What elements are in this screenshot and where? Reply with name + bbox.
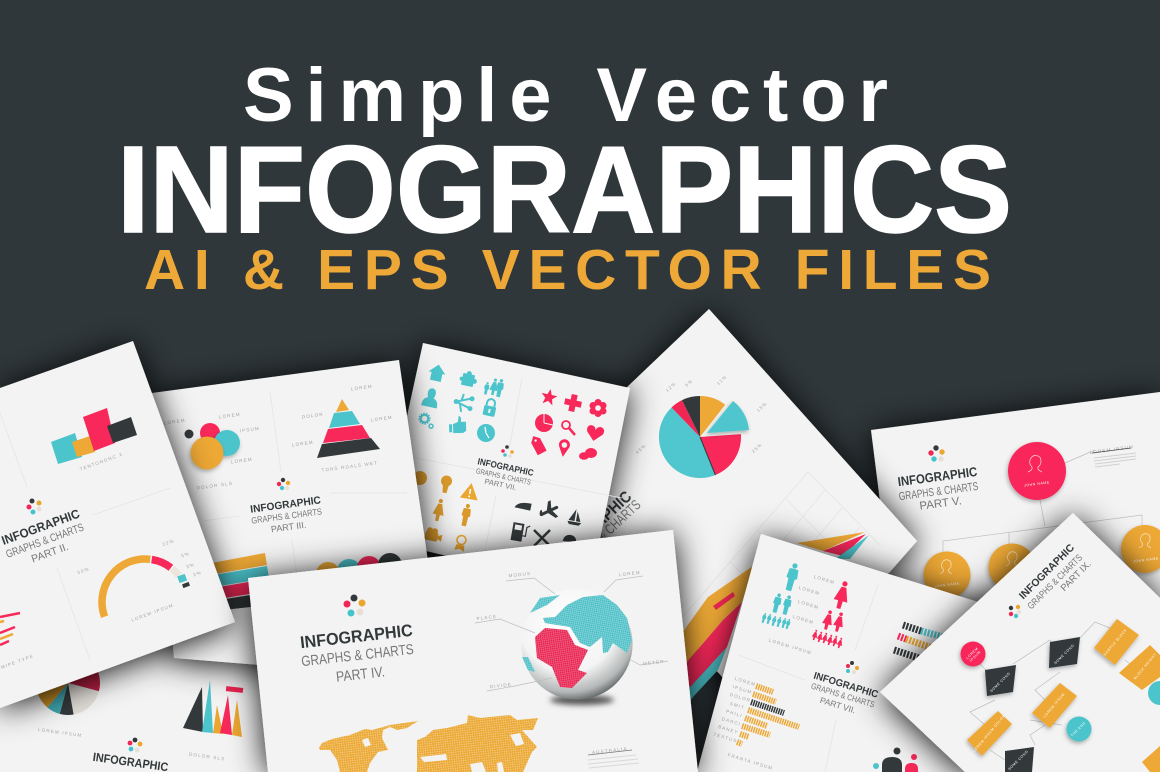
grid lines (680, 472, 880, 665)
pie labels: 11% (716, 374, 728, 386)
pyramid labels (292, 384, 393, 473)
subheading: GRAPHS & CHARTS (475, 466, 532, 487)
red start circle: LOREM (965, 646, 979, 660)
icon: chat bubbles (579, 448, 597, 460)
subtitle: AI & EPS vector files: AI & EPS VECTOR FILES (144, 238, 991, 302)
globe labels: METER (643, 659, 665, 666)
icon rows (894, 625, 943, 659)
pie labels: 45% (635, 443, 647, 455)
icon: map pin (557, 439, 571, 458)
bottom people (873, 748, 918, 772)
icon: heart (585, 424, 605, 443)
cluster labels: LOREM (231, 457, 253, 464)
people labels (768, 574, 836, 655)
gauge labels: 22% (162, 538, 175, 547)
panel: part VII icons (380, 343, 630, 590)
people bar labels: SMIT (729, 701, 746, 710)
dark icons (511, 499, 583, 546)
overlapping circles (316, 553, 402, 586)
pie chart (37, 658, 100, 715)
icon: thumbs up (449, 416, 466, 433)
cluster labels: LOREM (164, 418, 186, 425)
part label: PART IX. (1059, 559, 1094, 594)
people bar labels: IPSUM (732, 684, 753, 695)
process text (972, 628, 1158, 753)
icon: puzzle (458, 369, 479, 388)
teal pyramid of men (761, 562, 801, 629)
part label: PART VII. (484, 477, 517, 492)
people bar labels: PHILI (725, 709, 743, 718)
part label: PART VII. (819, 695, 857, 715)
subheading: GRAPHS & CHARTS (898, 481, 979, 503)
pyramid labels: LOREM (351, 384, 373, 391)
pyramid labels: TONS ROALS WET (321, 460, 378, 473)
end text: THE END (1070, 721, 1087, 738)
globe labels: MODUS (508, 571, 531, 578)
heading: INFOGRAPHIC (250, 494, 322, 516)
semicircle gauge (102, 559, 190, 617)
block chart caption: TENTONONC X (79, 451, 124, 472)
subheading: GRAPHS & CHARTS (301, 642, 415, 670)
orange profile circle left: JOHN NAME (934, 581, 960, 589)
icon: camera (424, 527, 443, 543)
icon: woman (431, 498, 447, 522)
panel: pie chart sheet (540, 309, 917, 720)
part label: PART II. (30, 541, 70, 565)
icon: flower (590, 399, 606, 417)
red icons (529, 388, 606, 460)
icon: sailboat (567, 508, 583, 526)
icon: medal (454, 535, 467, 552)
area chart (670, 532, 869, 715)
teal icons (418, 363, 505, 442)
icon: car (563, 534, 578, 543)
globe labels: PLACE (476, 614, 497, 621)
cluster labels (164, 412, 260, 490)
people bar labels: DOLOR (729, 692, 752, 703)
decision text (989, 643, 1075, 771)
red profile circle (1008, 442, 1066, 500)
icon: plane (536, 499, 562, 523)
icon: train (515, 500, 532, 511)
globe labels (475, 570, 668, 691)
circle cluster (184, 423, 240, 470)
panel: part III sheet (152, 360, 445, 680)
label: Australia: AUSTRALIA (592, 746, 628, 755)
icon: bulb (439, 475, 453, 494)
icon: pie (535, 414, 553, 432)
pie labels (635, 374, 768, 455)
red start circle (960, 642, 986, 666)
orange profile circle right (1121, 525, 1160, 573)
pie caption: LOREM IPSUM (38, 727, 83, 738)
cluster labels: IPSUM (239, 426, 260, 433)
red pyramid of women (811, 580, 852, 649)
people bar labels: DARCI (721, 716, 742, 727)
pie labels: 5% (684, 378, 694, 388)
part label: PART IV. (335, 664, 386, 686)
connector lines (970, 622, 1135, 760)
gauge labels: 3% (185, 562, 196, 569)
title: INFOGRAPHICS: INFOGRAPHICS (117, 122, 1012, 259)
title: Simple Vector: Simple Vector (243, 53, 888, 138)
gauge caption: LOREM IPSUM (131, 603, 174, 623)
gauge labels (77, 538, 203, 577)
subheading: GRAPHS & CHARTS (560, 496, 644, 576)
heading: INFOGRAPHIC (551, 488, 636, 569)
globe labels: LOREM (619, 570, 641, 577)
logo (26, 498, 42, 514)
icon: family (483, 376, 505, 398)
orange profile circle right: JOHN NAME (1133, 556, 1159, 564)
ribbon bars (190, 553, 277, 612)
icon: warning (460, 482, 480, 500)
process text: LOREM IPSUM DOLOR (972, 714, 1006, 753)
icon: user (421, 387, 441, 408)
part label: PART V. (919, 495, 962, 513)
red profile circle: JOHN NAME (1024, 480, 1050, 488)
icon: speech bubble (413, 471, 427, 485)
orange process boxes (967, 619, 1160, 772)
decision text: SOME COND (1007, 749, 1029, 771)
heading: INFOGRAPHIC (477, 456, 535, 478)
heading: INFOGRAPHIC (897, 464, 979, 489)
mountain chart (183, 680, 243, 737)
part label: PART III. (270, 520, 307, 534)
orange icons (413, 471, 480, 552)
cluster labels: LOREM (219, 412, 241, 419)
pie labels: 15% (756, 401, 768, 413)
bar chart caption: MIPE TYPE (0, 653, 35, 670)
orange profile circle left (924, 552, 970, 598)
logo (128, 738, 142, 752)
process text: BLOCK HEIGHT (1133, 652, 1158, 680)
label: Australia (588, 746, 639, 768)
bar chart (0, 613, 20, 645)
caption: FRANTA IPSUM (727, 752, 774, 771)
process text: SAMPLE BLOCK (1103, 628, 1128, 657)
people labels: LOREM IPSUM (768, 638, 813, 655)
heading: INFOGRAPHIC (299, 621, 414, 652)
icon: tag (529, 434, 547, 455)
pyramid labels: LOREM (371, 415, 393, 422)
orange profile circle middle (988, 544, 1036, 590)
icon: fuel pump (511, 522, 530, 543)
gauge labels: 5% (180, 551, 191, 558)
connector lines (943, 450, 1142, 558)
people bar chart (737, 686, 799, 744)
logo (1009, 605, 1021, 618)
people labels: LOREM (792, 614, 815, 625)
decision text: SOME COND (989, 671, 1011, 693)
panel: part II sheet (0, 341, 235, 708)
icon: star (540, 388, 558, 406)
icon: padlock (482, 398, 498, 417)
pie labels: 12% (665, 381, 677, 393)
pie labels: 25% (751, 442, 763, 454)
panel: part VII people (697, 534, 1010, 772)
world map (319, 715, 538, 772)
people labels: LOREM (813, 574, 836, 585)
heading: INFOGRAPHIC (0, 507, 82, 548)
pyramid labels: LOREM (292, 440, 314, 447)
people bar labels: TEXTUS (713, 732, 738, 744)
red start circle: IPSUM (969, 650, 982, 663)
panel: part IV main sheet (248, 530, 698, 772)
icon: share (453, 392, 474, 414)
pyramid (317, 399, 380, 458)
logo (344, 594, 366, 616)
people bar labels (713, 676, 757, 744)
chart caption: DOLOR SLS (189, 751, 226, 762)
logo (846, 661, 859, 674)
gauge labels: 2% (192, 570, 203, 577)
block chart (51, 408, 137, 464)
pyramid labels: DOLOR (302, 412, 324, 419)
subheading: GRAPHS & CHARTS (1026, 553, 1085, 612)
dark decision diamonds (985, 637, 1080, 772)
people labels: LOREM (798, 585, 821, 596)
icon: house (427, 363, 447, 383)
heading: INFOGRAPHIC (1017, 542, 1077, 602)
people labels: LOREM (797, 599, 820, 610)
teal end circles (1066, 681, 1160, 742)
people bar labels: LOREM (734, 676, 757, 687)
panel: part IX flowchart (880, 513, 1160, 772)
label lorem ipsum (1089, 444, 1136, 467)
globe labels: DIVIDE (490, 682, 512, 689)
gauge labels: 50% (77, 566, 90, 575)
label lorem ipsum: LOREM IPSUM (1089, 444, 1134, 455)
globe (521, 588, 633, 705)
heading: INFOGRAPHIC (812, 671, 879, 701)
decision text: SOME COND (1053, 643, 1075, 665)
icon: tools (534, 530, 550, 546)
logo (277, 478, 290, 490)
people bar labels: BANEY (718, 724, 739, 735)
icon: magnifier (562, 421, 575, 435)
icon: gears (418, 412, 435, 429)
logo (928, 445, 945, 462)
panel: bottom-left pie and mountain chart (0, 603, 285, 772)
pie chart (659, 396, 749, 478)
subheading: GRAPHS & CHARTS (251, 506, 322, 526)
panel: part V org chart (871, 392, 1160, 660)
subheading: GRAPHS & CHARTS (4, 522, 86, 561)
logo (501, 445, 514, 458)
cluster labels: DOLOR SLS (196, 481, 233, 490)
subheading: GRAPHS & CHARTS (810, 681, 876, 710)
icon: clock (477, 424, 495, 442)
icon: man (459, 503, 473, 527)
icon: cross (563, 393, 583, 413)
process text: LOREM IPSUM (1043, 692, 1066, 719)
